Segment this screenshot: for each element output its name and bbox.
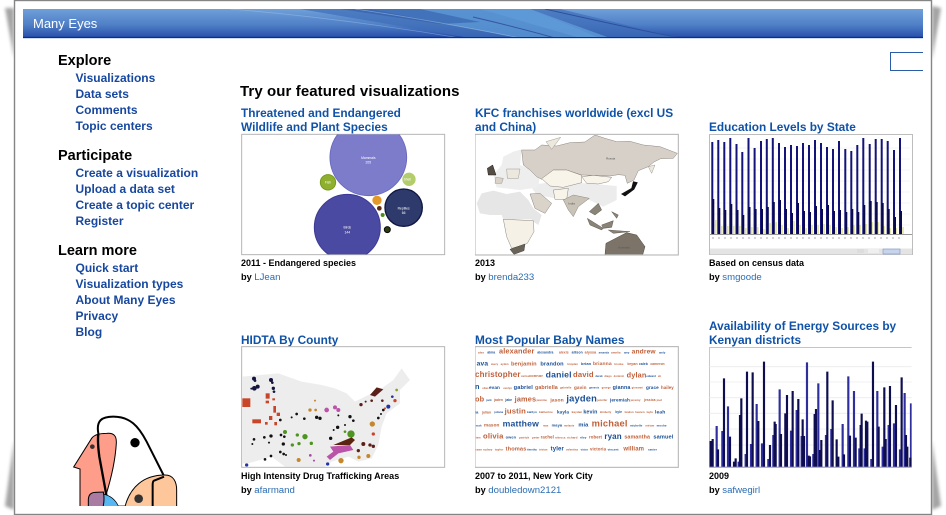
- word cloud: edward: [646, 374, 656, 378]
- word cloud: alexandra: [537, 351, 554, 355]
- word cloud: michelle: [630, 423, 643, 427]
- word cloud: jeremy: [630, 398, 641, 402]
- card: KFC franchises: and China): [475, 120, 536, 134]
- word cloud: ob: [475, 394, 485, 403]
- word cloud: rebecca: [555, 436, 566, 440]
- card: education levels: Education Levels by State: [709, 120, 856, 134]
- card: KFC franchises: 2013: [475, 258, 495, 268]
- card: threatened species: 2011 - Endangered species: [241, 258, 356, 268]
- word cloud: kimberly: [600, 410, 612, 414]
- word cloud: kyle: [615, 410, 622, 414]
- navigation sidebar: Data sets: [76, 87, 129, 101]
- word cloud: julian: [481, 410, 491, 414]
- world map: Australia: [618, 245, 630, 249]
- navigation sidebar: About Many Eyes: [76, 293, 176, 307]
- navigation sidebar: Visualizations: [76, 71, 155, 85]
- card: energy sources: Availability of Energy Sources by: [709, 319, 896, 333]
- bubble chart: Reptiles: [398, 207, 410, 211]
- word cloud: gabriel: [514, 385, 533, 391]
- bubble chart: Fish: [325, 181, 331, 185]
- word cloud: gavin: [574, 385, 587, 390]
- word cloud: katherine: [539, 410, 553, 414]
- word cloud: daniel: [546, 369, 572, 379]
- word cloud: jeremiah: [609, 397, 630, 402]
- card: HIDTA: HIDTA By County: [241, 333, 338, 347]
- word cloud: connor: [529, 373, 543, 378]
- word cloud: sean: [475, 447, 482, 451]
- card: baby names: 2007 to 2011, New York City: [475, 471, 593, 481]
- word cloud: matthew: [503, 419, 539, 429]
- word cloud: gabrielle: [560, 386, 572, 390]
- card: HIDTA: by afarmand: [241, 485, 295, 496]
- navigation sidebar: Create a visualization: [76, 166, 198, 180]
- word cloud: [475, 346, 679, 468]
- word cloud: liam: [475, 436, 481, 440]
- word cloud: alyssa: [585, 351, 597, 355]
- word cloud: andy: [659, 350, 666, 354]
- bubble chart: Birds: [344, 225, 351, 229]
- word cloud: gianna: [613, 385, 630, 391]
- word cloud: brianna: [593, 361, 612, 367]
- word cloud: landon: [625, 410, 634, 414]
- word cloud: noah: [475, 423, 482, 427]
- card: energy sources: Kenyan districts: [709, 333, 801, 347]
- word cloud: allison: [572, 351, 583, 355]
- word cloud: owen: [506, 435, 517, 440]
- word cloud: rachel: [541, 435, 554, 440]
- word cloud: grace: [646, 385, 659, 390]
- card: HIDTA: High Intensity Drug Trafficking Areas: [241, 471, 399, 481]
- word cloud: cameron: [650, 362, 665, 366]
- word cloud: alexander: [499, 347, 535, 356]
- nav heading: explore: Explore: [58, 53, 111, 69]
- navigation sidebar: Register: [76, 214, 124, 228]
- word cloud: amelia: [611, 350, 621, 354]
- word cloud: avery: [491, 362, 499, 366]
- word cloud: jaden: [493, 398, 503, 402]
- navigation sidebar: Privacy: [76, 309, 118, 323]
- word cloud: lauren: [635, 410, 645, 414]
- word cloud: ava: [477, 360, 488, 367]
- word cloud: moshe: [657, 423, 667, 427]
- nav heading: participate: Participate: [58, 148, 132, 164]
- word cloud: brandon: [540, 361, 564, 367]
- word cloud: jessica: [643, 398, 656, 402]
- word cloud: n: [475, 382, 480, 391]
- logo: many eyes figures: [72, 416, 178, 506]
- bubble chart: Mammals: [361, 156, 376, 160]
- word cloud: bryan: [627, 362, 638, 366]
- word cloud: dylan: [627, 370, 647, 379]
- card: baby names: by doubledown2121: [475, 485, 561, 496]
- word cloud: william: [622, 447, 644, 453]
- word cloud: evan: [489, 385, 500, 390]
- word cloud: michael: [592, 419, 628, 429]
- nav heading: learn more: Learn more: [58, 243, 137, 259]
- word cloud: james: [514, 395, 536, 404]
- card: KFC franchises: KFC franchises worldwide (excl US: [475, 106, 673, 120]
- bubble chart: 144: [345, 230, 350, 234]
- word cloud: jack: [485, 398, 492, 402]
- card: threatened species: Threatened and Endangered: [241, 106, 401, 120]
- word cloud: kaitlyn: [527, 410, 537, 414]
- word cloud: david: [573, 370, 594, 379]
- word cloud: ryan: [604, 432, 622, 441]
- word cloud: richard: [567, 436, 578, 440]
- word cloud: amanda: [599, 350, 609, 354]
- world map: India: [568, 201, 575, 205]
- word cloud: olivia: [483, 432, 504, 441]
- word cloud: eli: [658, 374, 661, 378]
- word cloud: max: [543, 424, 549, 427]
- word cloud: victoria: [590, 446, 607, 451]
- word cloud: taylor: [495, 447, 504, 451]
- word cloud: sydney: [483, 447, 493, 451]
- word cloud: melanie: [564, 423, 575, 427]
- word cloud: tyler: [551, 447, 564, 453]
- navigation sidebar: Create a topic center: [76, 198, 194, 212]
- word cloud: miriam: [645, 423, 655, 427]
- word cloud: victor: [581, 447, 588, 451]
- word cloud: jennifer: [596, 398, 607, 402]
- word cloud: alex: [478, 350, 484, 354]
- word cloud: evelyn: [503, 386, 512, 390]
- word cloud: ia: [475, 409, 479, 414]
- word cloud: george: [602, 386, 611, 390]
- word cloud: layla: [647, 410, 653, 414]
- word cloud: vincent: [608, 447, 619, 451]
- word cloud: jasmine: [536, 398, 547, 402]
- header banner: [23, 9, 923, 39]
- word cloud: alexis: [559, 351, 569, 355]
- word cloud: brian: [581, 361, 592, 366]
- word cloud: joel: [656, 398, 662, 402]
- card: energy sources: 2009: [709, 471, 729, 481]
- dot map: [241, 346, 446, 468]
- word cloud: jason: [549, 397, 564, 403]
- word cloud: jayden: [565, 394, 597, 404]
- card: KFC franchises: by brenda233: [475, 272, 534, 283]
- card: threatened species: Wildlife and Plant Species: [241, 120, 388, 134]
- word cloud: timothy: [527, 447, 537, 451]
- word cloud: thomas: [506, 447, 526, 453]
- word cloud: carlos: [521, 374, 530, 378]
- site name: Many Eyes: [33, 16, 97, 31]
- world map: [475, 134, 679, 256]
- word cloud: brooke: [614, 362, 624, 366]
- card: threatened species: by LJean: [241, 272, 280, 283]
- main heading: Try our featured visualizations: [240, 83, 460, 100]
- word cloud: gabriella: [535, 385, 558, 391]
- card: education levels: by smgoode: [709, 272, 762, 283]
- word cloud: riley: [580, 436, 587, 440]
- word cloud: valentina: [566, 447, 578, 451]
- word cloud: kayden: [572, 410, 582, 414]
- grouped bar chart: [709, 347, 912, 468]
- word cloud: leah: [655, 409, 665, 415]
- card: education levels: Based on census data: [709, 258, 804, 268]
- word cloud: juliana: [493, 410, 504, 414]
- card: energy sources: by safwegirl: [709, 485, 760, 496]
- word cloud: brayden: [567, 362, 578, 366]
- word cloud: andrew: [632, 349, 656, 356]
- bubble chart: 205: [366, 160, 371, 164]
- word cloud: giovanni: [632, 386, 643, 390]
- word cloud: benjamin: [511, 361, 537, 367]
- word cloud: maya: [552, 422, 563, 427]
- bubble chart: [241, 134, 446, 256]
- word cloud: caleb: [639, 362, 648, 366]
- word cloud: genesis: [589, 386, 600, 390]
- word cloud: tristan: [539, 447, 548, 451]
- navigation sidebar: Comments: [76, 103, 138, 117]
- word cloud: ayden: [501, 362, 509, 366]
- bubble chart: Shell: [404, 178, 411, 182]
- card: threatened species: [241, 106, 446, 283]
- word cloud: patrick: [519, 436, 529, 440]
- bar chart: [709, 134, 913, 255]
- card: energy sources: [709, 319, 912, 496]
- navigation sidebar: Topic centers: [76, 119, 153, 133]
- word cloud: hailey: [661, 385, 674, 390]
- word cloud: derek: [595, 374, 603, 378]
- navigation sidebar: Blog: [76, 325, 102, 339]
- word cloud: robert: [589, 435, 602, 440]
- navigation sidebar: Visualization types: [76, 277, 183, 291]
- word cloud: mia: [578, 423, 589, 429]
- card: baby names: Most Popular Baby Names: [475, 333, 624, 347]
- card: education levels: [709, 120, 913, 283]
- navigation sidebar: Quick start: [76, 261, 138, 275]
- card: HIDTA: [241, 333, 446, 496]
- bubble chart: 66: [402, 211, 406, 215]
- word cloud: xavier: [648, 447, 658, 451]
- navigation sidebar: Upload a data set: [76, 182, 175, 196]
- word cloud: samuel: [653, 435, 674, 441]
- word cloud: diego: [604, 374, 612, 378]
- word cloud: justin: [504, 407, 526, 416]
- navigation sidebar: [58, 53, 198, 339]
- word cloud: amy: [624, 351, 630, 354]
- word cloud: mason: [484, 422, 500, 427]
- word cloud: christopher: [475, 370, 521, 379]
- card: KFC franchises: [475, 106, 679, 283]
- world map: Russia: [606, 156, 616, 160]
- search box: [890, 52, 923, 71]
- card: baby names: [475, 333, 679, 496]
- word cloud: samantha: [624, 435, 650, 441]
- word cloud: kevin: [583, 409, 597, 415]
- word cloud: alma: [487, 351, 495, 355]
- word cloud: dominic: [614, 374, 625, 378]
- word cloud: jake: [504, 398, 512, 402]
- word cloud: peter: [532, 436, 540, 440]
- word cloud: elias: [482, 386, 489, 390]
- word cloud: kayla: [557, 409, 569, 414]
